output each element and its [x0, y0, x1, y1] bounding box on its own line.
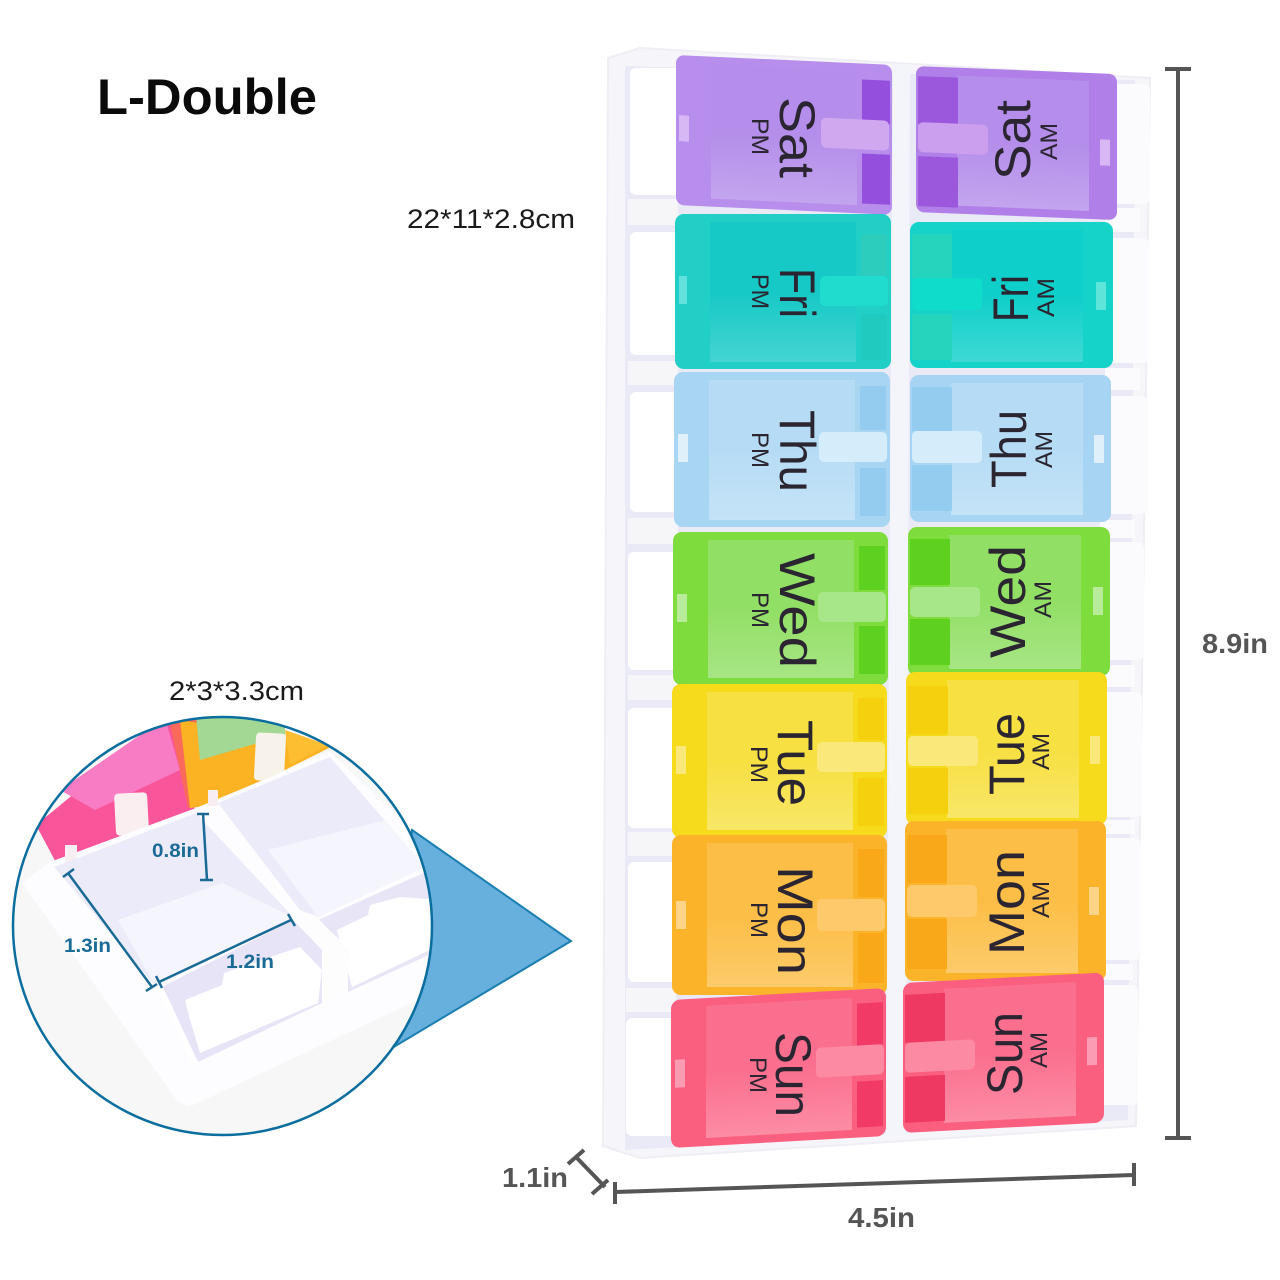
lid: Tue PM [672, 684, 887, 838]
lid: Wed PM: Wed [769, 553, 825, 668]
lid: Mon AM: AM [1028, 881, 1055, 918]
lid: Mon PM: Mon [767, 866, 823, 975]
lid: Sat AM: Sat [985, 100, 1041, 180]
depth dimension line [568, 1150, 608, 1194]
lid: Tue AM [906, 672, 1107, 825]
lid: Thu AM: Thu [981, 410, 1037, 488]
dimension: 1.3in [63, 869, 157, 991]
lower small lid two [337, 897, 440, 987]
lid: Sun AM: AM [1026, 1032, 1053, 1068]
lid: Sat AM: AM [1036, 123, 1063, 160]
lower small lid one [185, 947, 322, 1053]
lid: Wed PM [673, 532, 888, 685]
lid: Sun PM: Sun [765, 1032, 821, 1117]
lid: Sun AM: Sun [977, 1012, 1033, 1095]
title: L-Double [97, 69, 317, 125]
lid: Thu PM: Thu [769, 410, 825, 492]
lid: Wed PM: PM [746, 592, 773, 628]
dimension: 1.2in [156, 914, 295, 988]
width label: 4.5in [848, 1202, 915, 1233]
lower recess two [320, 873, 430, 992]
lid: Sun AM [903, 972, 1104, 1133]
center divider [886, 64, 910, 1135]
lid: Fri AM: Fri [983, 275, 1039, 322]
compartment one [54, 813, 293, 987]
lid: Mon AM [905, 821, 1106, 981]
height label: 8.9in [1202, 628, 1268, 659]
tray side tabs, right [1098, 84, 1150, 1105]
lid: Fri AM: AM [1033, 278, 1060, 317]
open tray outer body [54, 771, 284, 866]
lid: Mon AM: Mon [979, 850, 1035, 955]
central rib [312, 914, 326, 928]
lid: Wed AM [908, 527, 1110, 676]
compartment size label: 2*3*3.3cm [169, 676, 304, 706]
depth label: 1.1in [502, 1162, 568, 1193]
height dimension line [1165, 69, 1191, 1138]
lid: Sat PM: PM [746, 118, 773, 155]
compartment two [218, 757, 384, 917]
lid: Fri PM [675, 214, 891, 369]
lid: Sun PM: PM [744, 1057, 771, 1093]
lid: Tue AM: AM [1028, 733, 1055, 770]
dimension: 0.8in [197, 813, 213, 880]
tray side tabs, left [626, 68, 680, 1136]
lid: Thu AM [910, 375, 1111, 522]
lid: Tue AM: Tue [979, 713, 1035, 795]
label 0.8in: 0.8in [152, 841, 199, 862]
lid: Sun PM [671, 988, 886, 1148]
lid: Tue PM: PM [745, 746, 772, 783]
lid: Wed AM: Wed [980, 545, 1036, 658]
lid: Sat AM [916, 66, 1117, 220]
lid: Wed AM: AM [1030, 581, 1057, 618]
lid: Tue PM: Tue [767, 720, 823, 806]
lid: Fri AM [910, 222, 1113, 368]
label 1.2in: 1.2in [226, 952, 274, 973]
lid: Sat PM [676, 55, 892, 215]
lid: Mon PM [672, 835, 887, 995]
label 1.3in: 1.3in [64, 936, 111, 957]
lid: Fri PM: Fri [769, 268, 825, 318]
lid: Mon PM: PM [745, 902, 772, 938]
magnified compartment callout [13, 712, 445, 1135]
lid: Sat PM: Sat [769, 97, 825, 178]
colored lids behind the tray [38, 718, 330, 860]
callout pointer triangle [392, 830, 571, 1048]
lid: Thu PM [674, 372, 890, 527]
width dimension line [615, 1163, 1134, 1204]
lid: Thu PM: PM [746, 432, 773, 468]
lid: Fri PM: PM [746, 274, 773, 309]
lower recess one [160, 920, 322, 1062]
overall size label: 22*11*2.8cm [407, 204, 575, 234]
lid: Thu AM: AM [1031, 431, 1058, 468]
pill organizer tray [603, 48, 1150, 1158]
